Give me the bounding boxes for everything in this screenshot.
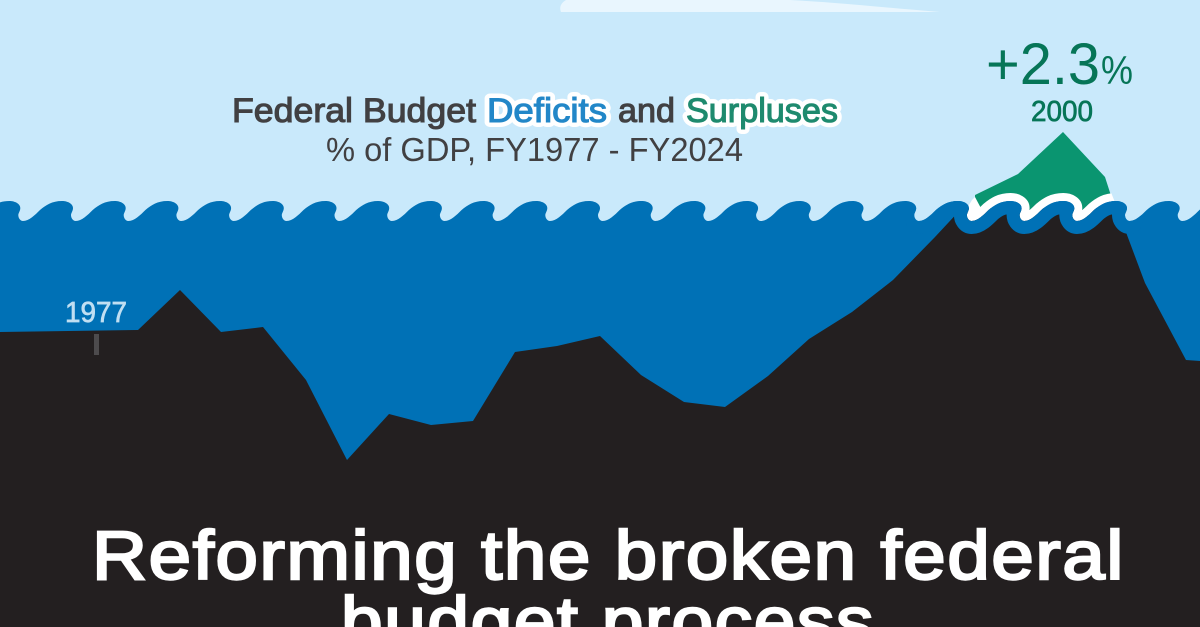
deficit mountain: [0, 201, 1200, 627]
chart heading: [232, 92, 838, 168]
main title: Reforming the broken federal: [92, 517, 1125, 594]
heading line: Federal Budget Deficits and Surpluses: [232, 92, 838, 130]
heading line: Federal Budget Deficits and Surpluses: Federal Budget: [232, 92, 477, 130]
heading line: Federal Budget Deficits and Surpluses: and: [618, 92, 675, 130]
percent sign: %: [1101, 49, 1133, 93]
year 2000: 2000: [1031, 96, 1093, 128]
start year label 1977: 1977: [65, 297, 127, 329]
white surplus waterline: [966, 197, 1116, 221]
heading line: Federal Budget Deficits and Surpluses: Surpluses: [686, 92, 838, 130]
value +2.3: +2.3: [986, 32, 1100, 97]
ocean waves: [0, 201, 1200, 460]
start year label 1977: [65, 297, 127, 355]
cloud: [560, 0, 940, 12]
heading line: Federal Budget Deficits and Surpluses: Deficits: [487, 92, 607, 130]
heading line: Federal Budget Deficits and Surpluses: Deficits: [487, 92, 607, 130]
heading line: units and period: % of GDP, FY1977 - FY2024: [326, 131, 743, 168]
peak value label: [986, 32, 1133, 128]
surplus peak 2000: [975, 132, 1114, 225]
heading line: Federal Budget Deficits and Surpluses: Surpluses: [686, 92, 838, 130]
main title: [92, 517, 1125, 627]
